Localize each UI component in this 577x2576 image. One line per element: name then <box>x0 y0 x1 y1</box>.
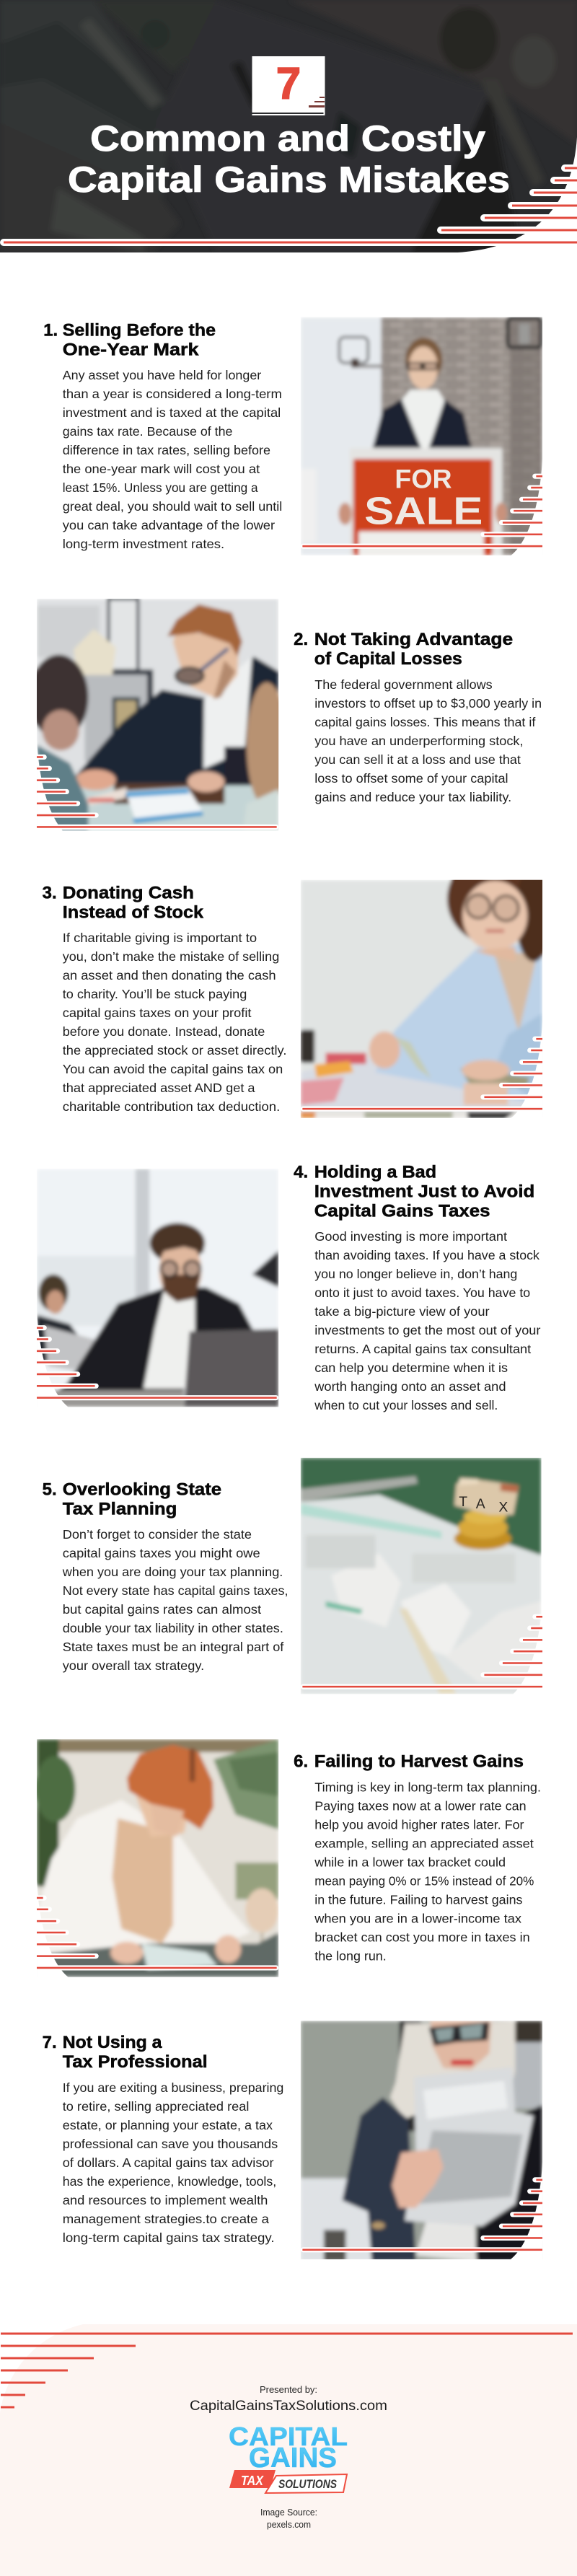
heading: mistake 1: Selling Before the <box>63 320 216 340</box>
body text: mistake 5: double your tax liability in other states. <box>63 1621 283 1635</box>
image source credit: Image Source: <box>260 2507 317 2518</box>
heading: mistake 4: Capital Gains Taxes <box>314 1202 490 1221</box>
body text: mistake 5: capital gains taxes you might owe <box>63 1546 260 1560</box>
heading: mistake 4 <box>294 1163 534 1221</box>
body text: mistake 3: that appreciated asset AND get a <box>63 1081 255 1095</box>
body text: mistake 4: when to cut your losses and sell. <box>314 1398 498 1412</box>
heading: mistake 1: One-Year Mark <box>63 340 199 359</box>
logo: Capital Gains Tax Solutions: TAX <box>241 2474 264 2488</box>
body text: mistake 1: Any asset you have held for longer <box>63 368 261 382</box>
heading: mistake 6: Failing to Harvest Gains <box>314 1751 524 1771</box>
body text: mistake 4: can help you determine when it is <box>314 1360 508 1375</box>
body text: mistake 6: while in a lower tax bracket could <box>314 1855 506 1870</box>
heading: mistake 6: 6. <box>294 1751 308 1771</box>
heading: mistake 5 <box>43 1480 221 1518</box>
heading: mistake 3: 3. <box>43 883 57 902</box>
body text: mistake 5: State taxes must be an integral part of <box>63 1640 284 1654</box>
heading: mistake 3: Donating Cash <box>63 883 194 902</box>
body text: mistake 6: mean paying 0% or 15% instead of 20% <box>314 1874 534 1889</box>
body text: mistake 4: Good investing is more important <box>314 1229 507 1244</box>
logo: Capital Gains Tax Solutions: CAPITAL <box>229 2422 348 2451</box>
panel: mistakes 1 and 2 <box>30 317 547 838</box>
body text: mistake 3: before you donate. Instead, donate <box>63 1024 265 1039</box>
photo: tax form with coins and tax blocks: X <box>498 1499 508 1515</box>
heading: mistake 4: 4. <box>294 1163 308 1182</box>
body text: mistake 6: when you are in a lower-income tax <box>314 1912 521 1926</box>
heading: mistake 7 <box>43 2033 208 2072</box>
body text: mistake 5: Not every state has capital gains taxes, <box>63 1583 288 1598</box>
body text: mistake 7 <box>63 2080 283 2245</box>
title: Capital Gains Mistakes <box>68 159 510 200</box>
photo: woman holding tax forms <box>301 2021 547 2261</box>
body text: mistake 6 <box>314 1780 541 1964</box>
heading: mistake 5: Tax Planning <box>63 1499 177 1518</box>
panel: mistakes 3 and 4 <box>32 853 552 1412</box>
body text: mistake 1: least 15%. Unless you are getting a <box>63 480 258 495</box>
body text: mistake 6: Timing is key in long-term tax planning. <box>314 1780 541 1795</box>
body text: mistake 2: gains and reduce your tax liability. <box>314 790 511 804</box>
body text: mistake 3: charitable contribution tax deduction. <box>63 1099 280 1114</box>
body text: mistake 4: worth hanging onto an asset and <box>314 1379 506 1394</box>
body text: mistake 3 <box>63 931 286 1114</box>
title: Common and Costly <box>90 118 485 159</box>
body text: mistake 7: of dollars. A capital gains tax advisor <box>63 2155 274 2170</box>
body text: mistake 5: your overall tax strategy. <box>63 1658 204 1673</box>
body text: mistake 7: management strategies.to create a <box>63 2212 269 2226</box>
body text: mistake 1: gains tax rate. Because of the <box>63 424 232 439</box>
body text: mistake 7: and resources to implement wealth <box>63 2193 268 2207</box>
background photo: dollar bills with note card <box>0 0 577 252</box>
body text: mistake 4 <box>314 1229 541 1412</box>
body text: mistake 3: the appreciated stock or asset directly. <box>63 1043 286 1058</box>
body text: mistake 4: returns. A capital gains tax consultant <box>314 1342 531 1356</box>
photo: advisor reviewing documents <box>30 599 287 838</box>
body text: mistake 7: If you are exiting a business, preparing <box>63 2080 283 2095</box>
heading: mistake 2: of Capital Losses <box>314 649 462 669</box>
panel: mistakes 5 and 6 <box>32 1458 547 1979</box>
photo: woman holding for sale sign <box>301 317 547 557</box>
logo: Capital Gains Tax Solutions <box>229 2422 348 2493</box>
photo: tax form with coins and tax blocks: T <box>459 1494 467 1510</box>
heading: mistake 5: Overlooking State <box>63 1480 221 1499</box>
heading: mistake 4: Holding a Bad <box>314 1163 436 1182</box>
presented by text <box>190 2385 387 2414</box>
body text: mistake 5: when you are doing your tax planning. <box>62 1565 283 1579</box>
body text: mistake 1: difference in tax rates, selling before <box>63 443 270 457</box>
white corner and stair stripes <box>0 137 577 252</box>
body text: mistake 2: loss to offset some of your capital <box>314 771 508 786</box>
body text: mistake 1: you can take advantage of the lower <box>63 518 275 532</box>
body text: mistake 6: bracket can cost you more in taxes in <box>314 1930 530 1945</box>
body text: mistake 6: in the future. Failing to harvest gains <box>314 1893 523 1907</box>
body text: mistake 4: take a big-picture view of your <box>314 1304 490 1319</box>
image source credit: pexels.com <box>267 2520 311 2530</box>
body text: mistake 4: investments to get the most out of your <box>314 1323 541 1337</box>
body text: mistake 7: long-term capital gains tax strategy. <box>63 2230 275 2245</box>
photo: woman holding for sale sign: FOR <box>395 465 452 494</box>
heading: mistake 7: 7. <box>43 2033 57 2052</box>
presented by text: CapitalGainsTaxSolutions.com <box>190 2399 387 2414</box>
logo: Capital Gains Tax Solutions: GAINS <box>249 2443 337 2474</box>
body text: mistake 6: example, selling an appreciated asset <box>314 1837 534 1851</box>
footer background <box>0 2324 577 2576</box>
body text: mistake 7: has the experience, knowledge, tools, <box>63 2174 276 2189</box>
body text: mistake 1: the one-year mark will cost you at <box>63 462 260 476</box>
heading: mistake 1: 1. <box>43 320 58 340</box>
body text: mistake 6: the long run. <box>314 1949 387 1964</box>
heading: mistake 7: Tax Professional <box>63 2052 208 2072</box>
body text: mistake 6: Paying taxes now at a lower rate can <box>314 1799 527 1814</box>
heading: mistake 5: 5. <box>43 1480 57 1499</box>
heading: mistake 4: Investment Just to Avoid <box>314 1182 534 1202</box>
body text: mistake 3: you, don’t make the mistake of selling <box>63 949 279 964</box>
presented by text: Presented by: <box>260 2385 317 2395</box>
body text: mistake 4: onto it just to avoid taxes. You have to <box>314 1285 530 1300</box>
body text: mistake 2: capital gains losses. This means that if <box>314 715 536 729</box>
image source credit <box>260 2507 317 2530</box>
body text: mistake 1: great deal, you should wait to sell until <box>63 499 282 514</box>
body text: mistake 2: investors to offset up to $3,000 yearly in <box>314 696 542 711</box>
body text: mistake 2 <box>314 677 542 804</box>
body text: mistake 3: You can avoid the capital gains tax on <box>63 1062 283 1076</box>
body text: mistake 4: you no longer believe in, don’t hang <box>314 1267 517 1281</box>
heading: mistake 2: 2. <box>294 630 308 649</box>
header banner <box>0 0 577 252</box>
body text: mistake 1: long-term investment rates. <box>63 537 224 551</box>
body text: mistake 2: The federal government allows <box>314 677 493 692</box>
heading: mistake 3: Instead of Stock <box>63 902 204 922</box>
body text: mistake 7: professional can save you thousands <box>63 2137 278 2151</box>
body text: mistake 3: capital gains taxes on your profit <box>63 1006 252 1020</box>
photo: woman counting cash <box>300 880 542 1118</box>
body text: mistake 2: you can sell it at a loss and use that <box>314 752 521 767</box>
photo: woman holding for sale sign: SALE <box>364 490 483 533</box>
body text: mistake 3: to charity. You’ll be stuck paying <box>63 987 247 1001</box>
body text: mistake 7: to retire, selling appreciated real <box>63 2099 249 2114</box>
body text: mistake 5: Don’t forget to consider the state <box>63 1527 252 1542</box>
body text: mistake 6: help you avoid higher rates later. For <box>314 1818 524 1832</box>
logo: Capital Gains Tax Solutions: SOLUTIONS <box>278 2478 337 2491</box>
body text: mistake 7: estate, or planning your estate, a tax <box>63 2118 273 2132</box>
photo: tax form with coins and tax blocks <box>301 1458 547 1697</box>
number badge <box>252 56 325 115</box>
panel: mistake 7 <box>43 2021 547 2261</box>
body text: mistake 2: you have an underperforming stock, <box>314 734 524 748</box>
photo: red-haired woman writing <box>32 1739 278 1979</box>
body text: mistake 4: than avoiding taxes. If you have a stock <box>314 1248 539 1262</box>
number badge: 7 <box>276 59 301 109</box>
heading: mistake 1 <box>43 320 216 359</box>
title <box>68 118 510 200</box>
heading: mistake 2: Not Taking Advantage <box>314 630 513 649</box>
body text: mistake 3: If charitable giving is important to <box>63 931 257 945</box>
footer stripes <box>1 2333 573 2408</box>
body text: mistake 5: but capital gains rates can almost <box>63 1602 261 1617</box>
heading: mistake 2 <box>294 630 513 669</box>
body text: mistake 1 <box>63 368 282 551</box>
footer panel <box>0 2324 577 2576</box>
body text: mistake 3: an asset and then donating the cash <box>63 968 276 983</box>
photo: tax form with coins and tax blocks: A <box>476 1496 485 1512</box>
photo: businessman at laptop <box>32 1169 278 1409</box>
body text: mistake 5 <box>62 1527 288 1673</box>
body text: mistake 1: investment and is taxed at the capital <box>63 405 281 420</box>
heading: mistake 7: Not Using a <box>63 2033 162 2052</box>
heading: mistake 3 <box>43 883 204 922</box>
body text: mistake 1: than a year is considered a long-term <box>63 387 282 401</box>
